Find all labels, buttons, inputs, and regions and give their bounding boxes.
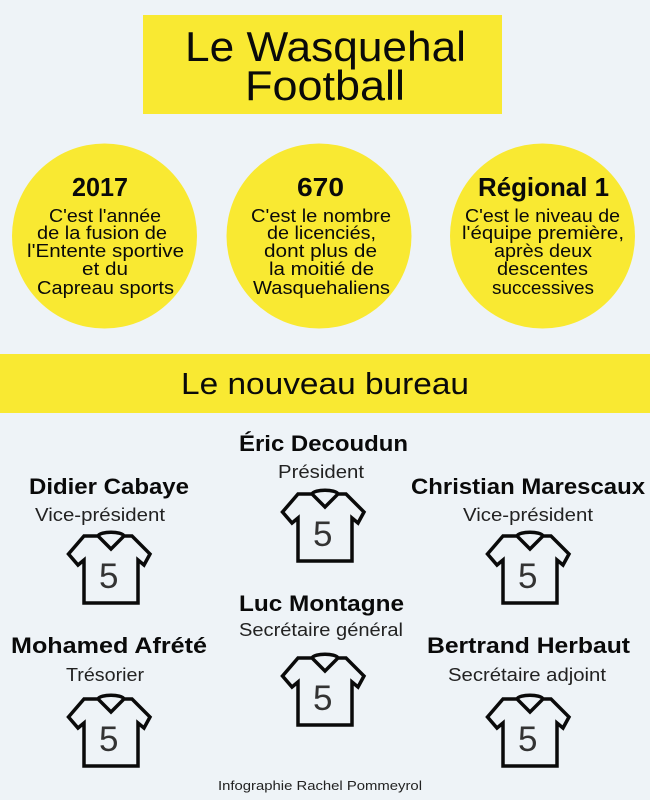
member: Christian Marescaux: [411, 474, 646, 603]
panel: stat Régional 1: descentes: [497, 259, 588, 279]
member: Éric Decoudun: Président: [278, 462, 364, 482]
credit: Infographie Rachel Pommeyrol: [218, 778, 422, 793]
panel: stat 2017: et du: [82, 259, 128, 279]
title: [143, 15, 502, 114]
panel: stat Régional 1: l'équipe première,: [462, 223, 624, 243]
panel: stat 2017: l'Entente sportive: [27, 241, 184, 261]
icon: shirt: 5: [518, 720, 537, 759]
panel: stat Régional 1: [450, 144, 635, 328]
panel: stat 2017: de la fusion de: [37, 223, 167, 243]
heading: le nouveau bureau: [0, 354, 650, 413]
panel: stat 2017: Capreau sports: [37, 278, 174, 298]
member: Didier Cabaye: [29, 474, 189, 603]
member: Bertrand Herbaut: Secrétaire adjoint: [448, 665, 606, 685]
icon: shirt: [282, 490, 364, 561]
member: Christian Marescaux: Christian Marescaux: [411, 474, 646, 499]
member: Éric Decoudun: Éric Decoudun: [239, 431, 408, 456]
panel: stat Régional 1: successives: [492, 278, 594, 298]
panel: stat Régional 1: Régional 1: [478, 172, 609, 202]
panel: stat 670: de licenciés,: [267, 223, 376, 243]
panel: stat 670: C'est le nombre: [251, 206, 391, 226]
panel: stat 2017: C'est l'année: [49, 206, 161, 226]
member: Mohamed Afrété: [11, 633, 207, 766]
icon: shirt: 5: [518, 557, 537, 596]
member: Didier Cabaye: Didier Cabaye: [29, 474, 189, 499]
member: Mohamed Afrété: Trésorier: [66, 665, 144, 685]
member: Luc Montagne: Secrétaire général: [239, 620, 403, 640]
title: Le Wasquehal: [185, 23, 466, 70]
member: Christian Marescaux: Vice-président: [463, 505, 593, 525]
member: Luc Montagne: [239, 591, 404, 725]
heading: le nouveau bureau: Le nouveau bureau: [181, 366, 469, 401]
icon: shirt: [488, 695, 569, 766]
member: Didier Cabaye: Vice-président: [35, 505, 165, 525]
title: Football: [245, 62, 405, 109]
panel: stat Régional 1: C'est le niveau de: [465, 206, 620, 226]
panel: stat 670: [226, 144, 412, 328]
icon: shirt: [68, 695, 150, 766]
panel: stat 2017: [12, 144, 197, 328]
member: Mohamed Afrété: Mohamed Afrété: [11, 633, 207, 658]
panel: stat 670: 670: [297, 172, 344, 202]
panel: stat 670: dont plus de: [264, 241, 377, 261]
icon: shirt: [282, 654, 364, 725]
member: Éric Decoudun: [239, 431, 408, 561]
icon: shirt: 5: [313, 515, 332, 554]
panel: stat 2017: 2017: [72, 172, 128, 202]
icon: shirt: 5: [99, 720, 118, 759]
icon: shirt: [488, 532, 569, 603]
member: Bertrand Herbaut: [427, 633, 631, 766]
panel: stat Régional 1: après deux: [494, 241, 592, 261]
icon: shirt: 5: [99, 557, 118, 596]
icon: shirt: [68, 532, 150, 603]
panel: stat 670: Wasquehaliens: [253, 278, 390, 298]
icon: shirt: 5: [313, 679, 332, 718]
member: Bertrand Herbaut: Bertrand Herbaut: [427, 633, 631, 658]
panel: stat 670: la moitié de: [269, 259, 374, 279]
member: Luc Montagne: Luc Montagne: [239, 591, 404, 616]
